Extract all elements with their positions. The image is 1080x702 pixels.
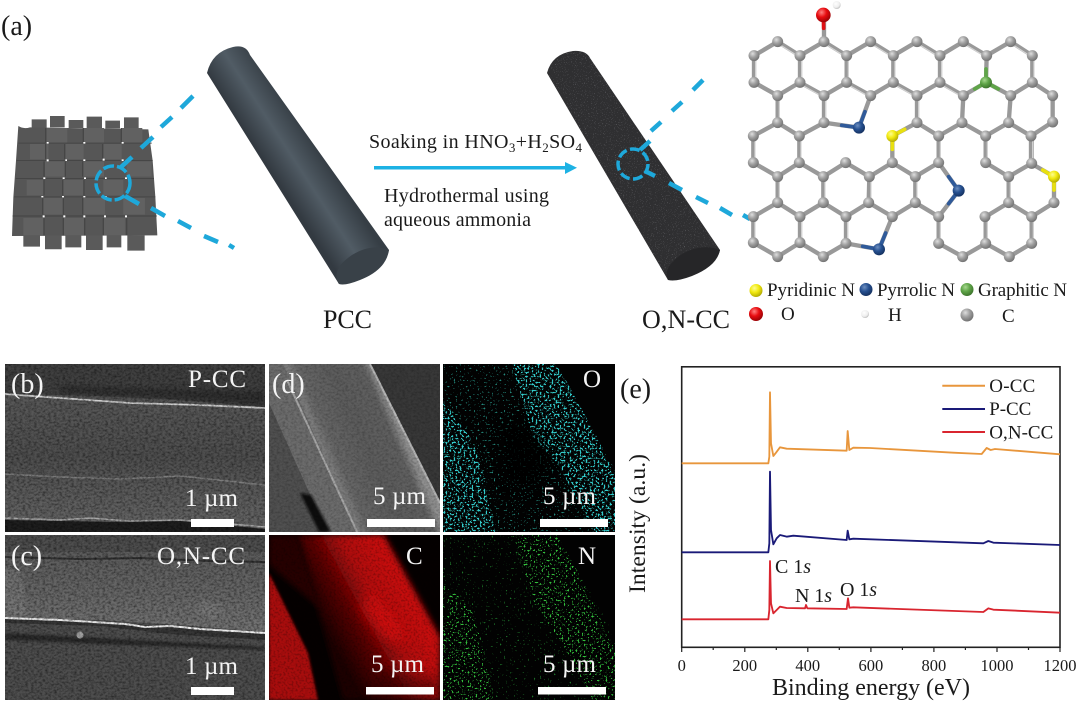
spectrum: O-CC xyxy=(682,392,1060,463)
text: soaking step: 4 xyxy=(576,140,582,155)
panel: (d) SEM of single fibre xyxy=(269,364,440,532)
legend item O-CC: O-CC xyxy=(989,376,1035,397)
legend: oxygen xyxy=(749,304,795,325)
arrow: process direction xyxy=(374,162,577,174)
legend: carbon xyxy=(960,306,1015,327)
text: soaking step: +H xyxy=(516,131,542,153)
legend: pyrrolic N: Pyrrolic N xyxy=(877,280,955,301)
chart axes xyxy=(682,367,1060,652)
panel label and scale (b): 1 µm xyxy=(185,485,239,512)
map label and scale O: 5 µm xyxy=(543,483,597,510)
text: soaking step: SO xyxy=(549,131,575,153)
text: soaking step: 2 xyxy=(542,140,549,155)
panel: (e) XPS survey chart xyxy=(620,367,1076,701)
x axis tick labels: 200 xyxy=(732,656,757,675)
legend: atom types xyxy=(749,280,1067,327)
zoom circle and dashed lines on treated fibre xyxy=(618,80,750,219)
x axis tick labels: 800 xyxy=(922,656,946,675)
peak label O 1s: O 1s xyxy=(840,579,877,601)
text: aqueous ammonia: aqueous ammonia xyxy=(384,209,531,231)
icon: woven carbon cloth xyxy=(12,116,157,251)
x axis tick labels: 1200 xyxy=(1044,656,1076,675)
panel label and scale (d): (d) xyxy=(272,369,305,400)
panel label and scale (d): 5 µm xyxy=(373,483,427,510)
label O,N-CC: O,N-CC xyxy=(642,305,730,334)
panel label and scale (c) xyxy=(11,541,245,695)
map label and scale O xyxy=(540,366,608,527)
peak label C 1s: C 1s xyxy=(775,556,811,578)
map label and scale C: C xyxy=(406,543,423,570)
panel: N elemental map xyxy=(443,535,615,700)
map label and scale N: 5 µm xyxy=(543,651,597,678)
legend: oxygen: O xyxy=(781,304,795,325)
spectrum: O,N-CC xyxy=(682,561,1060,619)
panel label and scale (c): (c) xyxy=(11,541,42,572)
map label and scale N: N xyxy=(578,543,596,570)
panel label and scale (b) xyxy=(11,366,246,527)
panel: (c) SEM of O,N-CC xyxy=(5,535,265,700)
x axis tick labels: 600 xyxy=(859,656,883,675)
panel: (a) schematic of fibre treatment xyxy=(1,1,1067,334)
panel: O elemental map xyxy=(443,364,615,532)
label (a): (a) xyxy=(1,11,32,42)
map label and scale N xyxy=(538,543,606,694)
legend: carbon: C xyxy=(1002,306,1015,327)
spectra xyxy=(682,392,1060,619)
map label and scale C xyxy=(366,543,434,694)
legend: hydrogen: H xyxy=(888,305,902,326)
panel label and scale (b): P-CC xyxy=(188,366,246,393)
text: soaking step: Soaking in HNO xyxy=(369,131,508,153)
panel label and scale (d) xyxy=(272,369,435,527)
legend item P-CC: P-CC xyxy=(989,399,1031,420)
panel: (b) SEM of P-CC xyxy=(5,364,265,532)
legend item O,N-CC: O,N-CC xyxy=(989,422,1053,444)
panel label and scale (c): 1 µm xyxy=(185,653,239,680)
y axis title: Intensity (a.u.) xyxy=(625,454,651,593)
text: soaking step: 3 xyxy=(509,140,515,155)
text: hydrothermal step: Hydrothermal using xyxy=(384,185,549,207)
panel label and scale (b): (b) xyxy=(11,369,44,400)
label PCC: PCC xyxy=(323,305,372,334)
chart legend xyxy=(942,376,1053,444)
map label and scale O: O xyxy=(583,366,601,393)
legend: pyridinic N: Pyridinic N xyxy=(767,280,855,301)
x axis tick labels: 400 xyxy=(795,656,820,675)
spectrum: P-CC xyxy=(682,472,1060,552)
map label and scale C: 5 µm xyxy=(371,651,425,678)
label (e): (e) xyxy=(620,374,651,405)
legend: hydrogen xyxy=(861,305,902,326)
diagram: N-doped graphene lattice xyxy=(748,1,1060,262)
peak label N 1s: N 1s xyxy=(795,585,832,607)
zoom circle and dashed lines on cloth xyxy=(96,96,234,248)
x axis tick labels: 0 xyxy=(678,656,686,675)
x axis title: Binding energy (eV) xyxy=(772,675,970,701)
x axis tick labels: 1000 xyxy=(980,656,1014,675)
legend: graphitic N: Graphitic N xyxy=(978,280,1067,301)
panel: C elemental map xyxy=(269,535,440,700)
panel label and scale (c): O,N-CC xyxy=(157,543,245,570)
x axis tick labels xyxy=(678,656,1076,675)
icon: pristine carbon fibre PCC xyxy=(207,46,389,284)
icon: treated fibre O,N-CC xyxy=(547,50,720,280)
